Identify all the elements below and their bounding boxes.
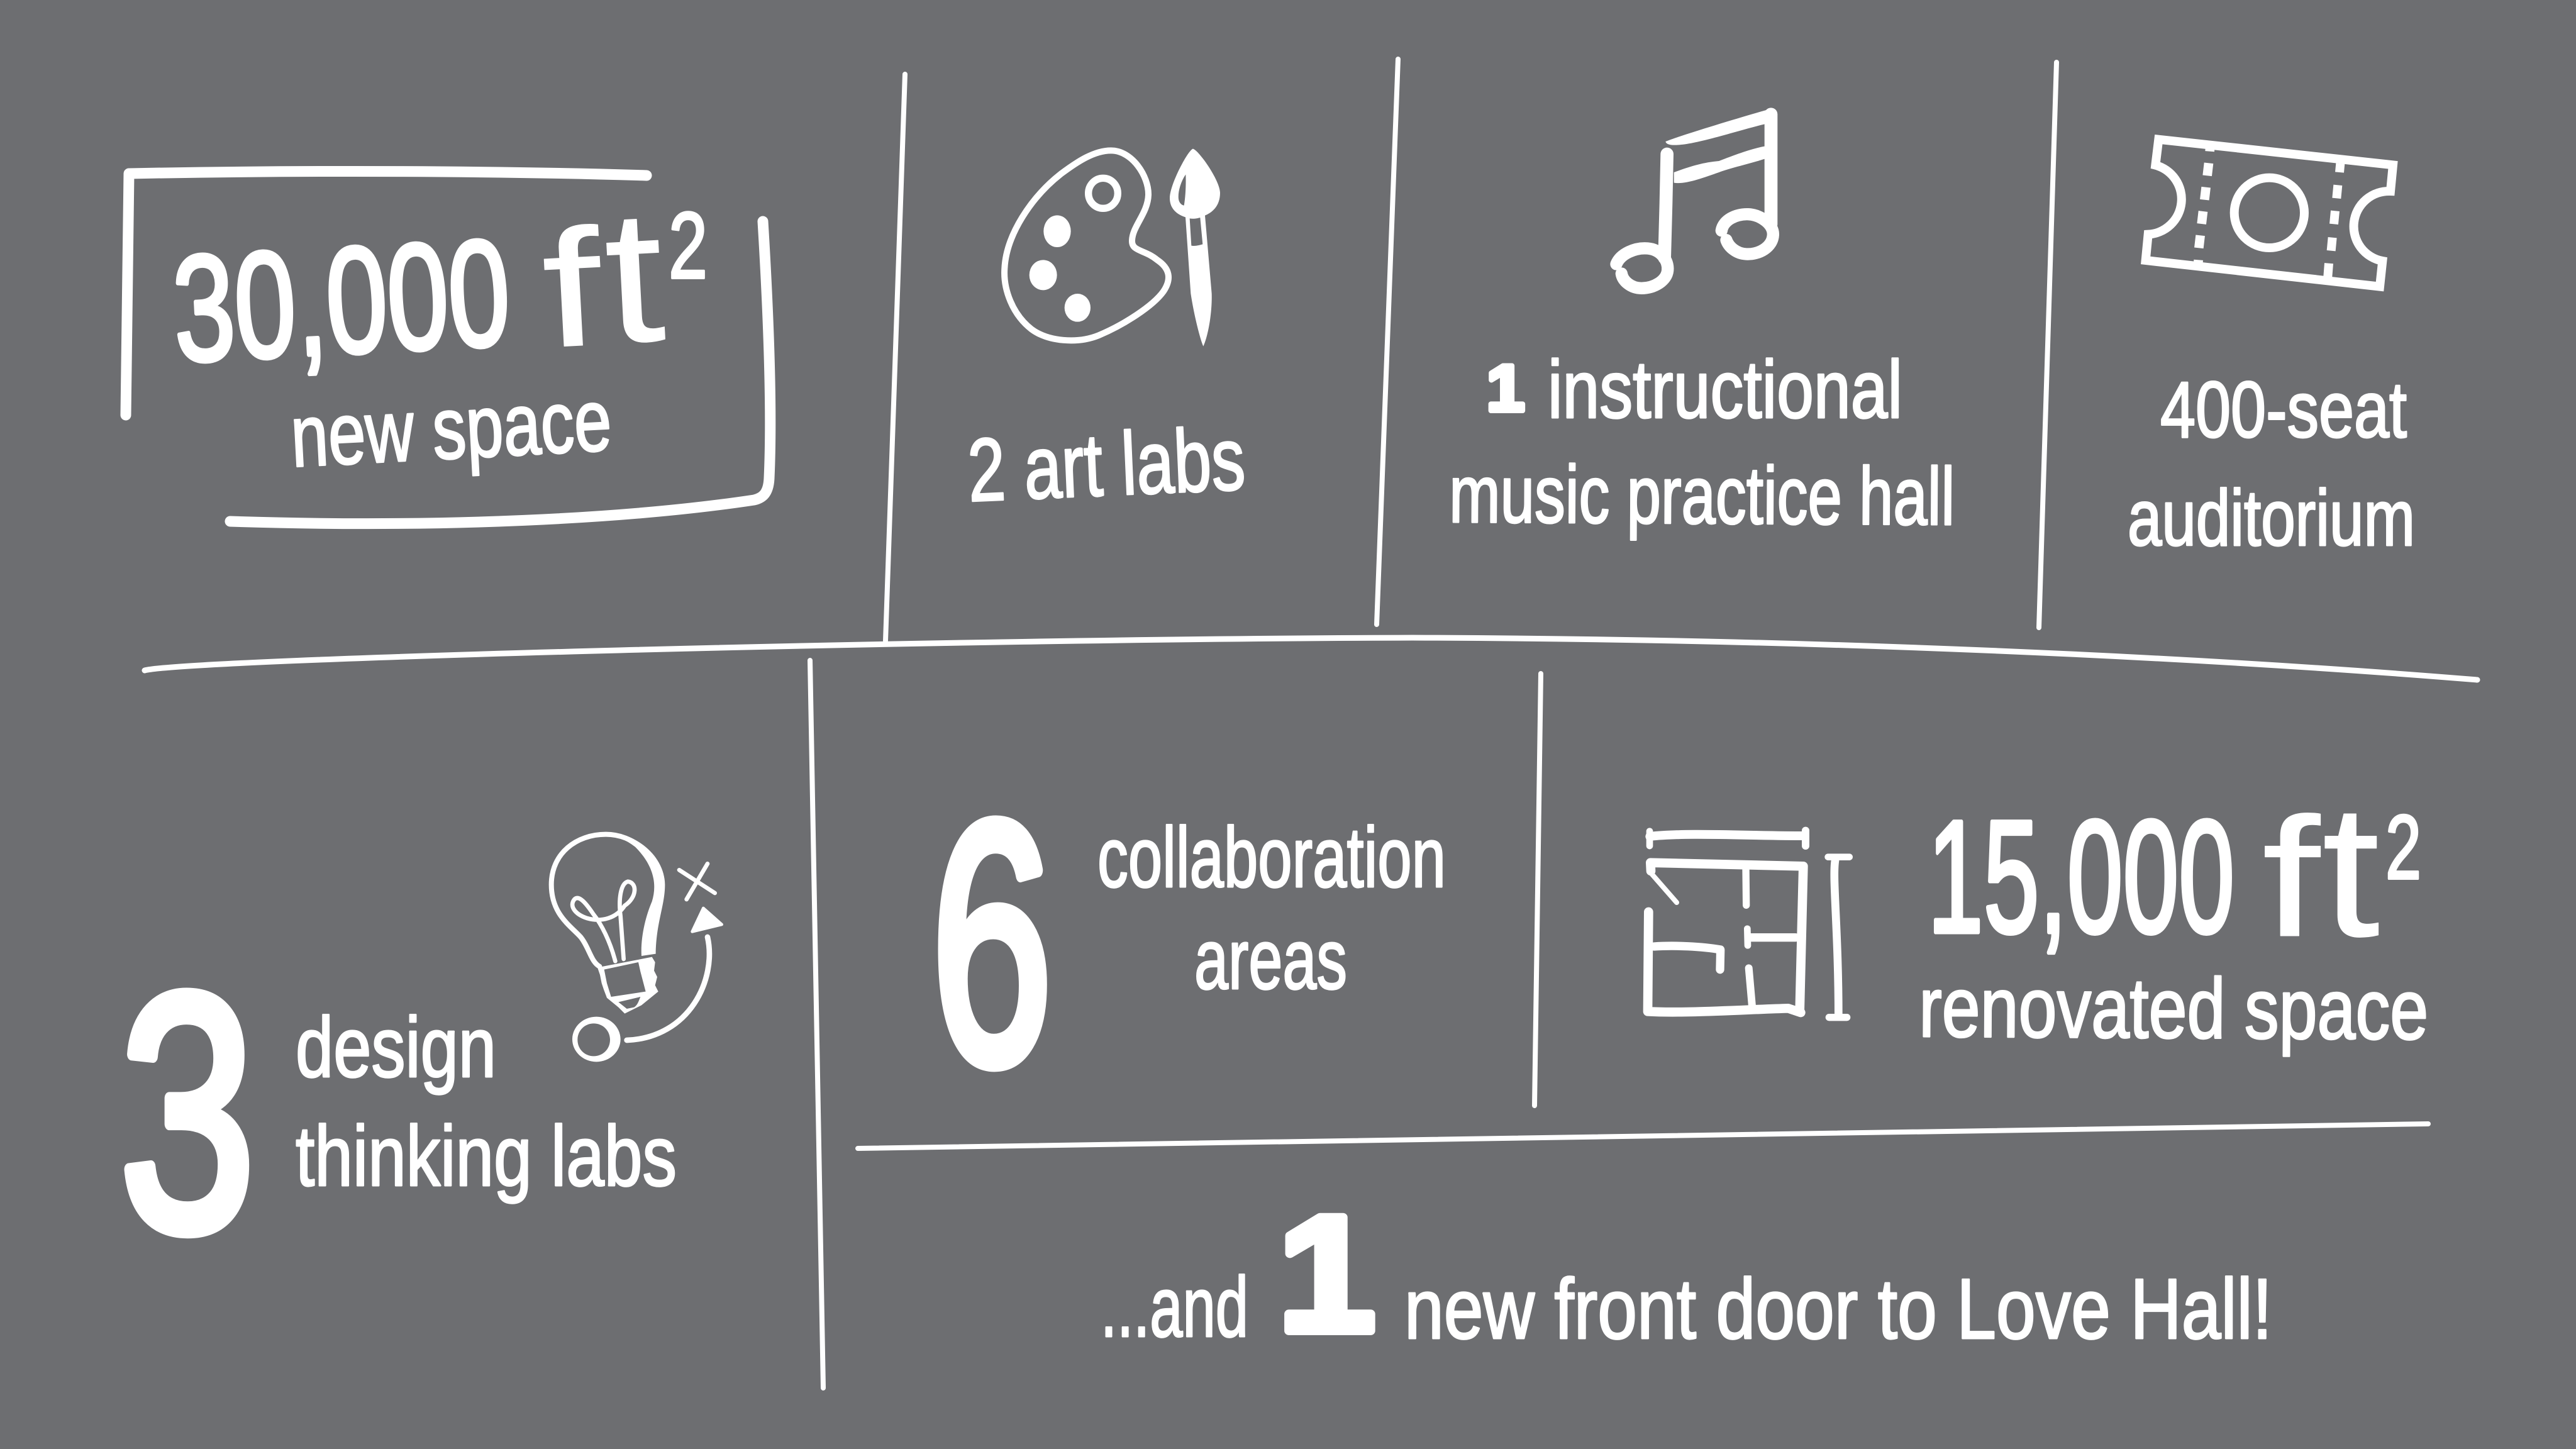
panel: new front door closing line	[1101, 1182, 2272, 1366]
stat: 30,000 ft squared: 2	[669, 192, 708, 298]
stat: 15,000 ft squared: 2	[2385, 796, 2421, 898]
icon: palette and brush	[1004, 149, 1220, 347]
icon: music notes	[1616, 109, 1777, 288]
label: design thinking labs: design	[296, 999, 496, 1095]
stat: 15,000 ft squared: 15,000	[1928, 787, 2235, 967]
stat: 30,000 ft squared: t	[600, 169, 669, 383]
panel: design thinking labs	[119, 832, 722, 1301]
label: design thinking labs: thinking labs	[296, 1108, 677, 1204]
label: renovated space: renovated space	[1919, 959, 2429, 1057]
label: design thinking labs	[296, 999, 677, 1204]
label: collaboration areas: collaboration	[1097, 809, 1446, 905]
label: 1 instructional music practice hall: 1	[1487, 352, 1524, 425]
stat: 1: 1	[1278, 1182, 1375, 1366]
label: new space: new space	[288, 370, 614, 486]
panel: auditorium	[2128, 140, 2415, 562]
label: 400-seat auditorium: auditorium	[2128, 474, 2415, 562]
label: 400-seat auditorium	[2128, 365, 2415, 562]
label: 2 art labs: 2 art labs	[965, 409, 1247, 521]
label: collaboration areas	[1097, 809, 1446, 1007]
panel: 30,000 square feet new space	[126, 169, 770, 524]
label: 400-seat auditorium: 400-seat	[2160, 365, 2407, 454]
icon: ticket	[2146, 140, 2393, 287]
label: 1 instructional music practice hall: music practice hall	[1449, 448, 1955, 542]
label: 1 instructional music practice hall: instructional	[1548, 343, 1902, 435]
text: new front door to Love Hall!: new front door to Love Hall!	[1404, 1261, 2272, 1357]
stat: 15,000 ft squared: f	[2262, 783, 2321, 972]
stat: 15,000 ft squared: t	[2322, 765, 2380, 976]
label: collaboration areas: areas	[1194, 911, 1347, 1007]
stat: 30,000 ft squared: f	[538, 194, 606, 383]
icon: light bulb with arrow	[552, 832, 722, 1062]
panel: 15,000 square feet renovated space	[1648, 765, 2429, 1057]
panel: music practice hall	[1449, 109, 1955, 542]
icon: floor plan	[1648, 831, 1850, 1018]
label: 1 instructional music practice hall	[1449, 343, 1955, 542]
hand-drawn frame	[126, 171, 770, 524]
stat: 3: 3	[119, 925, 255, 1301]
panel: collaboration areas	[931, 752, 1446, 1135]
stat: 6: 6	[931, 752, 1052, 1135]
panel: art labs	[965, 149, 1247, 521]
stat: 30,000 ft squared: 30,000	[169, 208, 514, 394]
text: ...and: ...and	[1101, 1259, 1248, 1355]
